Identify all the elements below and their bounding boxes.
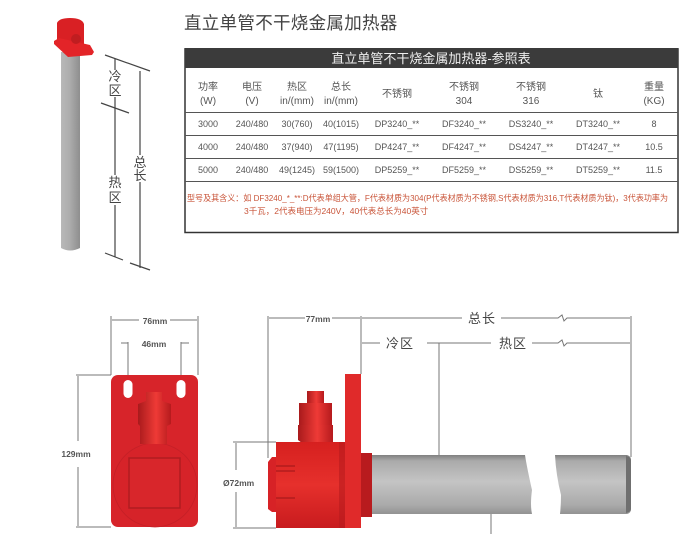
panel: specification table (184, 48, 678, 232)
column headers: 不锈钢 (382, 87, 412, 100)
column headers: 总长 (331, 80, 351, 93)
dimension lines: 冷区 热区 总长: 长 (133, 168, 147, 183)
row: 4000 W: 47(1195) (323, 142, 359, 152)
red terminal head (54, 18, 94, 57)
row: 3000 W: DS3240_** (509, 119, 554, 129)
dimension lines: 冷区 热区 总长 (101, 55, 150, 270)
column headers: 热区 (287, 80, 307, 93)
row: 4000 W: DT4247_** (576, 142, 621, 152)
column headers: 钛 (593, 88, 603, 100)
row: 5000 W: DF5259_** (442, 165, 487, 175)
dimension lines: 冷区 热区 总长: 区 (108, 190, 122, 205)
row: 4000 W: DS4247_** (509, 142, 554, 152)
panel: side view drawing (223, 311, 631, 534)
red mounting plate (111, 375, 198, 527)
row: 3000 W: 8 (651, 119, 657, 129)
label: 总长: 总长 (468, 311, 496, 326)
dimension lines: 冷区 热区 总长: 冷 (108, 69, 122, 84)
dimension: 76mm: 76mm (143, 316, 168, 326)
column headers: (KG) (643, 96, 665, 107)
row: 3000 W: DT3240_** (576, 119, 621, 129)
column headers: (W) (200, 96, 216, 107)
column headers: (V) (245, 96, 259, 107)
label: 冷区: 冷区 (386, 336, 414, 351)
dimension: 46mm (121, 339, 189, 376)
panel: front view drawing (61, 316, 198, 527)
row: 5000 W (198, 165, 662, 175)
row: 4000 W (198, 142, 663, 152)
column headers: 304 (456, 96, 473, 107)
column headers: 不锈钢 (449, 80, 479, 93)
row: 3000 W: DP3240_** (375, 119, 420, 129)
row: 3000 W: 30(760) (281, 119, 313, 129)
dimension lines (233, 315, 631, 534)
column headers: 不锈钢 (516, 80, 546, 93)
row: 4000 W: 4000 (198, 142, 218, 152)
model number note: 型号及其含义：如 DF3240_*_**:D代表单组大管，F代表材质为304(P代表材质为不锈钢,S代表材质为316,T代表材质为钛)，3代表功率为 (187, 193, 668, 203)
row: 5000 W: 59(1500) (323, 165, 359, 175)
dimension: 76mm (111, 316, 198, 375)
row: 3000 W: 40(1015) (323, 119, 359, 129)
row: 5000 W: 11.5 (646, 165, 662, 175)
column headers: 功率 (198, 80, 218, 93)
label: Ø72mm: Ø72mm (223, 478, 255, 488)
red terminal housing (268, 374, 372, 528)
column headers (198, 80, 665, 107)
table frame (185, 49, 678, 232)
column headers: 重量 (644, 80, 664, 93)
model number note: 3千瓦，2代表电压为240V，40代表总长为40英寸 (244, 206, 429, 216)
table header bar: 直立单管不干烧金属加热器-参照表 (331, 51, 531, 66)
label: 77mm: 77mm (306, 314, 331, 324)
column headers: 316 (523, 96, 540, 107)
row: 4000 W: 240/480 (236, 142, 268, 152)
label: 热区: 热区 (499, 336, 527, 351)
row: 5000 W: 5000 (198, 165, 218, 175)
icon: vertical heater 3D view (54, 18, 150, 270)
row: 5000 W: 49(1245) (279, 165, 315, 175)
row: 3000 W (198, 119, 657, 129)
row: 4000 W: DF4247_** (442, 142, 487, 152)
row: 5000 W: 240/480 (236, 165, 268, 175)
table header bar (184, 48, 678, 68)
row: 5000 W: DP5259_** (375, 165, 420, 175)
row: 3000 W: 3000 (198, 119, 218, 129)
column headers: in/(mm) (280, 96, 314, 107)
dimension lines: 冷区 热区 总长: 热 (108, 175, 122, 190)
row: 5000 W: DS5259_** (509, 165, 554, 175)
title: 直立单管不干烧金属加热器 (184, 13, 398, 33)
dimension: 129mm (61, 375, 111, 527)
column headers: in/(mm) (324, 96, 358, 107)
dimension lines: 冷区 热区 总长: 总 (133, 155, 147, 170)
dimension: 129mm: 129mm (61, 449, 91, 459)
dimension: 46mm: 46mm (142, 339, 167, 349)
row: 4000 W: 37(940) (281, 142, 313, 152)
row: 4000 W: 10.5 (645, 142, 663, 152)
heater tube with break (372, 455, 631, 514)
column headers: 电压 (242, 80, 262, 93)
row: 3000 W: DF3240_** (442, 119, 487, 129)
dimension lines: 冷区 热区 总长: 区 (108, 83, 122, 98)
row: 5000 W: DT5259_** (576, 165, 621, 175)
row: 3000 W: 240/480 (236, 119, 268, 129)
model number note (187, 193, 668, 216)
heater tube (61, 52, 80, 250)
row: 4000 W: DP4247_** (375, 142, 420, 152)
